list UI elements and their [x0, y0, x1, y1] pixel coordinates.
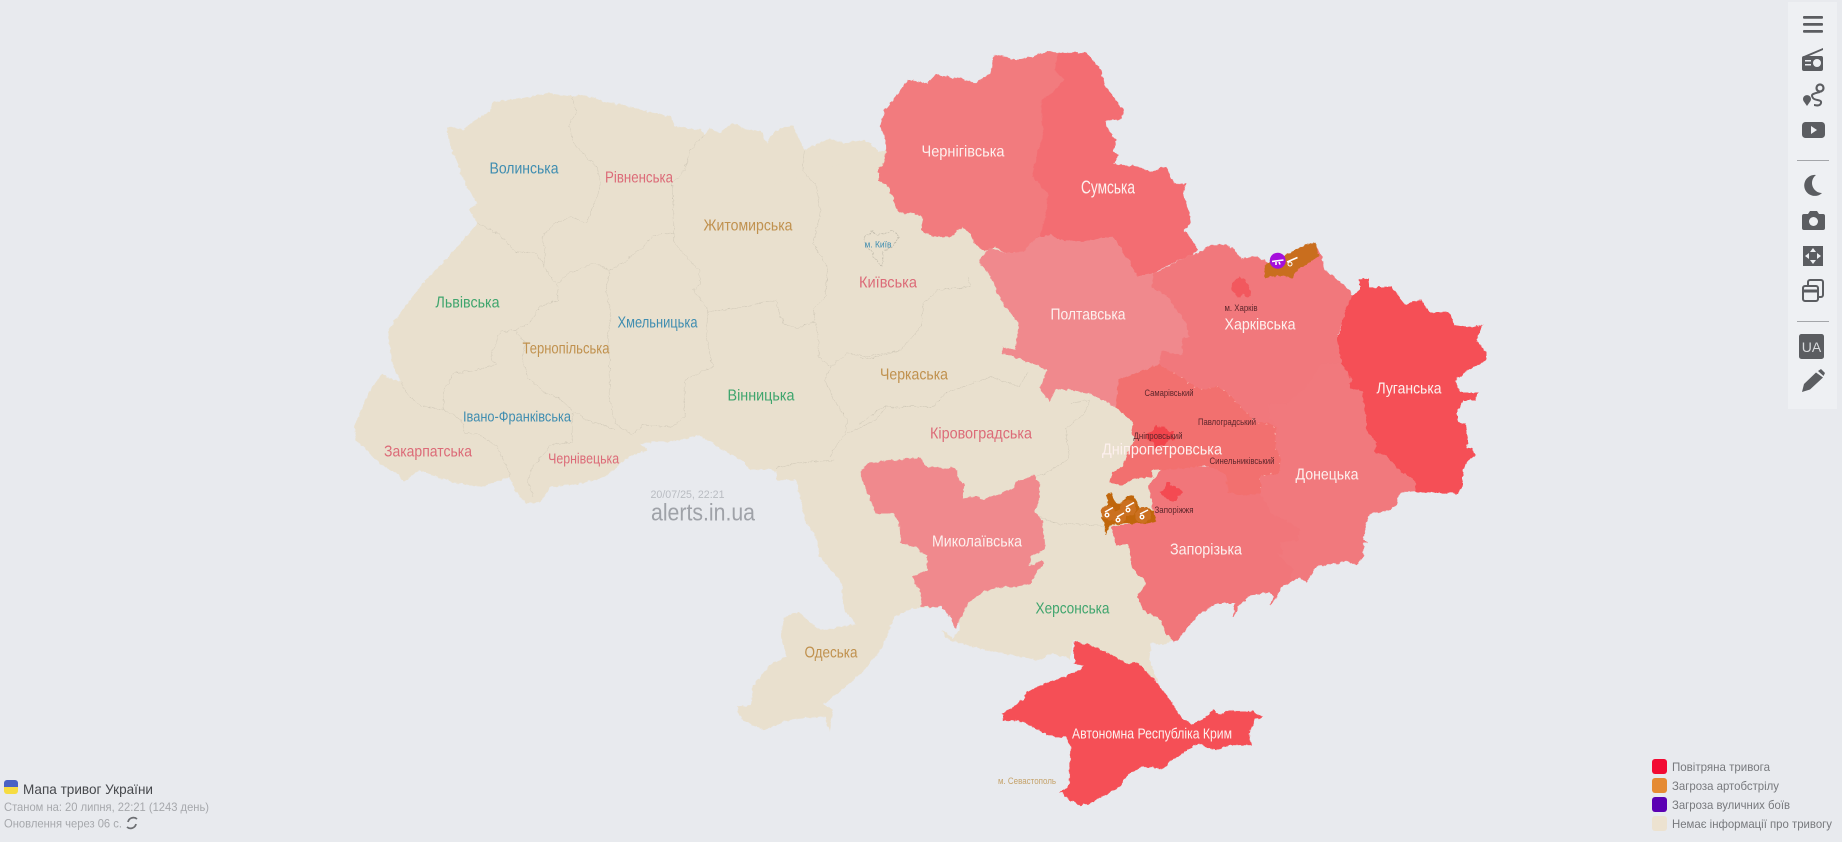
label: Chernihiv: Чернігівська: [922, 143, 1005, 160]
label: Lviv: Львівська: [436, 294, 500, 311]
region: Dnipropetrovsk: [1110, 365, 1281, 495]
region: Crimea: [1003, 642, 1263, 805]
icon: edit: [1802, 369, 1825, 392]
title block: [4, 780, 209, 830]
label: Poltava: Полтавська: [1050, 306, 1126, 323]
toolbar panel: [1788, 2, 1837, 409]
label: Ivano-Frankivsk: Івано-Франківська: [463, 408, 572, 425]
legend: artillery: Загроза артобстрілу: [1672, 779, 1779, 793]
region: Luhansk: [1338, 279, 1486, 493]
region: Donetsk: [1260, 363, 1417, 582]
label: Samar district: Самарівський: [1144, 388, 1194, 398]
label: Sumy: Сумська: [1081, 177, 1136, 197]
icon: Kyiv city outline: [864, 230, 899, 266]
label: Kharkiv city: м. Харків: [1224, 303, 1258, 313]
icons: artillery near Zaporizhzhia: [1105, 502, 1148, 522]
site name: alerts.in.ua: [651, 500, 756, 526]
region labels: [384, 143, 1442, 786]
map shapes: [354, 52, 1486, 805]
label: Volyn: Волинська: [490, 160, 559, 177]
status date: Станом на: 20 липня, 22:21 (1243 день): [4, 800, 209, 814]
label: Zakarpattia: Закарпатська: [384, 443, 472, 460]
western and central regions without alert: [354, 93, 1201, 732]
icon: refresh: [127, 818, 137, 828]
watermark: [650, 489, 756, 526]
toolbar: [1788, 2, 1837, 409]
divider: [1797, 160, 1829, 161]
icon: Ukrainian flag: [4, 780, 18, 794]
divider: [1797, 321, 1829, 322]
legend: air raid: Повітряна тривога: [1672, 760, 1770, 774]
label: Crimea: Автономна Республіка Крим: [1072, 725, 1232, 742]
region: Mykolaiv: [861, 458, 1046, 628]
artillery threat area: Kharkiv border: [1265, 243, 1318, 278]
label: Kherson: Херсонська: [1036, 600, 1110, 617]
icon: route: [1803, 84, 1824, 106]
label: Sevastopol: м. Севастополь: [998, 776, 1056, 786]
icon: camera: [1802, 211, 1825, 230]
legend: [1652, 759, 1832, 831]
label: Dnipropetrovsk: Дніпропетровська: [1102, 441, 1222, 458]
label: Kyiv: Київська: [859, 274, 917, 291]
label: Zaporizhzhia city: Запоріжжя: [1154, 505, 1194, 515]
icon: video: [1802, 122, 1825, 138]
label: Kyiv city: м. Київ: [864, 239, 892, 249]
icon: menu: [1803, 16, 1823, 33]
update countdown: Оновлення через 06 с.: [4, 816, 122, 830]
icon: street fighting: [1270, 253, 1286, 269]
icon: rifle: [1272, 260, 1284, 265]
legend: no information: Немає інформації про тривогу: [1672, 817, 1832, 831]
map of Ukraine: [354, 52, 1486, 805]
label: Cherkasy: Черкаська: [880, 366, 948, 383]
label: Donetsk: Донецька: [1296, 466, 1359, 483]
label: Vinnytsia: Вінницька: [728, 387, 795, 404]
timestamp: 20/07/25, 22:21: [650, 489, 724, 501]
icon: dark mode: [1804, 175, 1822, 196]
label: Pavlohrad district: Павлоградський: [1198, 417, 1256, 427]
artillery threat area: Zaporizhzhia front: [1101, 493, 1157, 535]
title: Мапа тривог України: [23, 781, 153, 797]
legend: street fighting: Загроза вуличних боїв: [1672, 798, 1790, 812]
label: Kirovohrad: Кіровоградська: [930, 425, 1032, 442]
label: Zaporizhzhia: Запорізька: [1170, 541, 1242, 558]
region: Kharkiv: [1152, 243, 1352, 463]
region: Chernihiv: [878, 52, 1066, 253]
button: language: [1799, 334, 1824, 359]
label: Chernivtsi: Чернівецька: [548, 450, 620, 467]
icon: radio: [1802, 48, 1823, 71]
label: Khmelnytskyi: Хмельницька: [618, 314, 698, 331]
icon: Kharkiv city: [1231, 277, 1252, 298]
button: language: UA: [1802, 339, 1822, 355]
internal oblast borders: [401, 97, 1112, 527]
region: Sumy: [1032, 53, 1199, 277]
region: Poltava: [978, 235, 1190, 407]
icon: Dnipro city: [1146, 425, 1175, 449]
label: Odesa: Одеська: [804, 644, 858, 661]
icon: Zaporizhzhia city: [1160, 482, 1183, 501]
label: Dnipro district: Дніпровський: [1134, 431, 1182, 441]
region: Zaporizhzhia: [1112, 465, 1307, 642]
icon: artillery near Kharkiv: [1287, 258, 1298, 266]
icon: windows: [1803, 280, 1823, 301]
label: Rivne: Рівненська: [605, 169, 673, 186]
label: Synelnykove district: Синельниківський: [1210, 456, 1274, 466]
icon: fullscreen: [1803, 246, 1823, 266]
label: Luhansk: Луганська: [1376, 380, 1442, 397]
label: Mykolaiv: Миколаївська: [932, 533, 1022, 550]
label: Ternopil: Тернопільська: [522, 340, 610, 357]
label: Zhytomyr: Житомирська: [704, 217, 793, 234]
label: Kharkiv: Харківська: [1224, 316, 1296, 333]
